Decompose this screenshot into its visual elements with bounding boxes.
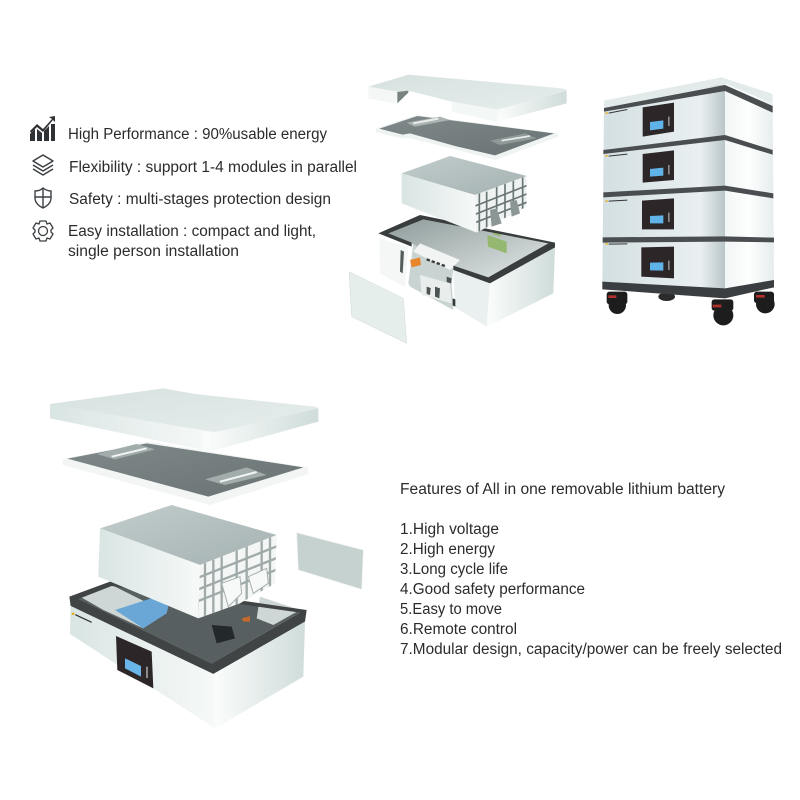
side panel sheet	[349, 272, 407, 343]
control panels	[641, 103, 674, 278]
list item: high performance: High Performance : 90%usable energy	[68, 126, 327, 143]
feature 6: 6.Remote control	[400, 621, 517, 638]
text block: performance list	[68, 126, 357, 260]
text block: features of battery	[400, 481, 782, 658]
lid	[368, 75, 567, 122]
feature 2: 2.High energy	[400, 541, 495, 558]
control panel	[116, 636, 153, 688]
features heading: Features of All in one removable lithium battery	[400, 481, 725, 498]
list item: easy installation: Easy installation : compact and light,	[68, 223, 316, 240]
side panel sheet	[297, 533, 363, 589]
feature 3: 3.Long cycle life	[400, 561, 508, 578]
battery module	[98, 505, 278, 620]
battery base open enclosure	[378, 215, 555, 327]
icon: shield	[35, 188, 51, 208]
icon: performance chart	[30, 116, 55, 141]
icon: gear	[33, 221, 53, 241]
lid	[50, 388, 318, 451]
list item: flexibility: Flexibility : support 1-4 modules in parallel	[69, 159, 357, 176]
feature 4: 4.Good safety performance	[400, 581, 585, 598]
inner tray	[376, 115, 558, 160]
wheels	[607, 292, 775, 325]
inner tray	[63, 442, 308, 505]
feature 7: 7.Modular design, capacity/power can be freely selected	[400, 641, 782, 658]
exploded battery view: rear	[349, 75, 567, 343]
list item: easy installation continued: single person installation	[68, 243, 239, 260]
battery base open enclosure	[69, 582, 307, 728]
stacked battery tower	[602, 77, 775, 325]
feature 1: 1.High voltage	[400, 521, 499, 538]
list item: safety: Safety : multi-stages protection design	[69, 191, 331, 208]
battery module	[402, 156, 528, 233]
module bands	[602, 85, 774, 298]
brand marks	[605, 109, 627, 245]
feature 5: 5.Easy to move	[400, 601, 502, 618]
tower body	[602, 77, 774, 292]
exploded battery view: front	[50, 388, 363, 728]
icon: stacked layers	[33, 155, 53, 175]
